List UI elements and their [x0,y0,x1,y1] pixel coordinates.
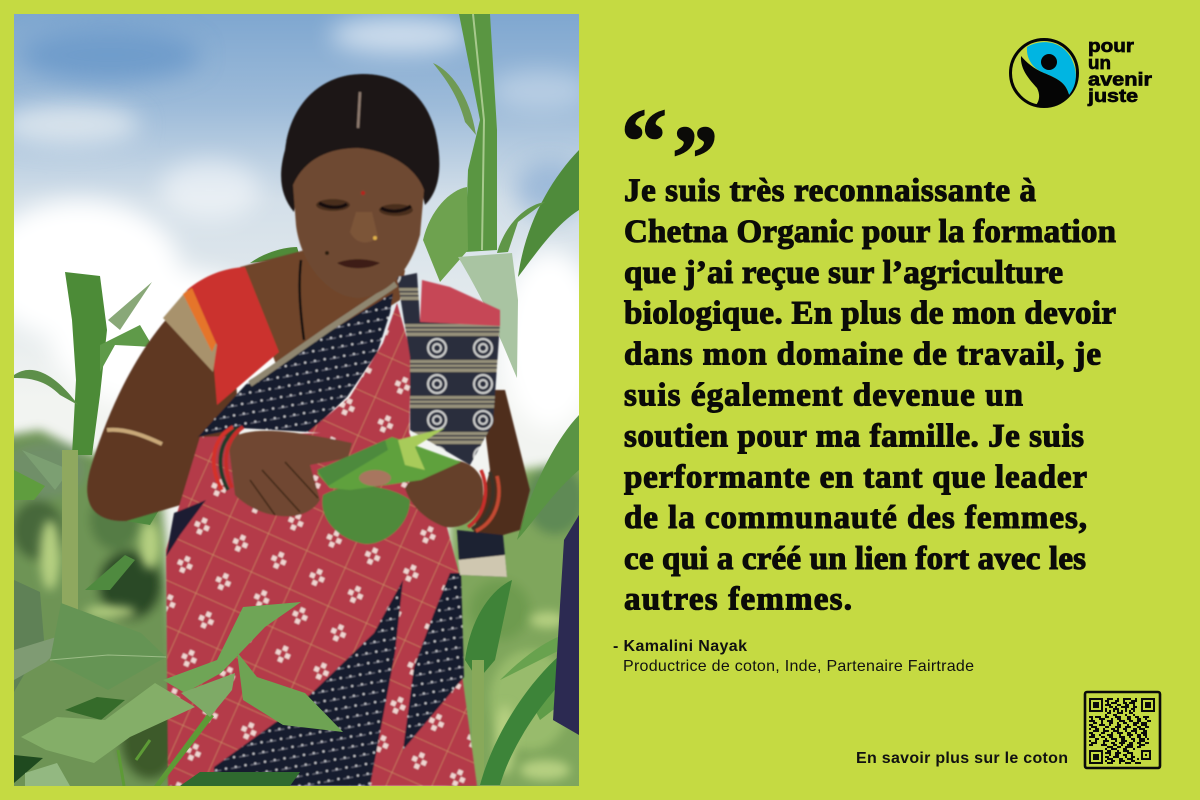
head: facial features [316,92,413,268]
logo symbol [1010,40,1078,106]
corn plants [14,14,579,785]
right hand [405,460,483,527]
sari: striped panel [397,273,500,465]
sky with clouds [0,14,600,786]
left arm [87,310,240,521]
logo tagline: juste [1087,85,1138,106]
cotton leaf held in hands [317,428,461,544]
woman figure [87,74,530,786]
QR code [1084,690,1162,770]
quote text: suis également devenue un [624,378,1023,414]
quote text [624,173,1116,618]
quote text: ce qui a créé un lien fort avec les [624,541,1086,577]
attribution: - Kamalini Nayak [613,638,747,655]
quote text: soutien pour ma famille. Je suis [624,418,1084,454]
chest and neck [240,250,405,375]
quote text: biologique. En plus de mon devoir [624,296,1116,332]
attribution [613,638,974,675]
sari: lower red drape [166,430,477,786]
head: face [293,148,424,298]
blouse [187,267,279,405]
logo tagline: un [1088,52,1111,73]
attribution: Productrice de coton, Inde, Partenaire Fairtrade [623,658,974,675]
sari: lower navy panels [214,580,403,786]
sari: pink pleat [308,303,411,440]
photo: woman inspecting a cotton leaf in a field [14,14,579,786]
logo tagline [1087,35,1152,106]
quote text: Je suis très reconnaissante à [624,173,1036,209]
quote text: dans mon domaine de travail, je [624,336,1101,372]
logo: Fairtrade "pour un avenir juste" [1009,35,1152,108]
right arm [470,390,530,545]
right bangles [468,470,499,531]
logo tagline: pour [1088,35,1134,56]
quote text: de la communauté des femmes, [624,500,1087,536]
left hand [228,431,352,516]
logo tagline: avenir [1088,68,1152,90]
quote text: autres femmes. [624,582,852,618]
bangles [214,427,243,490]
foreground cotton leaves [14,580,343,786]
quote text: Chetna Organic pour la formation [624,214,1116,250]
link caption: En savoir plus sur le coton [856,750,1068,767]
quotation marks [621,95,718,170]
far-right person's garment [553,515,579,735]
head: hair [281,74,439,212]
quote text: performante en tant que leader [624,460,1087,496]
cuff cloth [456,529,506,560]
background foliage [14,423,579,786]
sari: navy band over chest [198,293,393,437]
quote text: que j’ai reçue sur l’agriculture [624,255,1063,291]
